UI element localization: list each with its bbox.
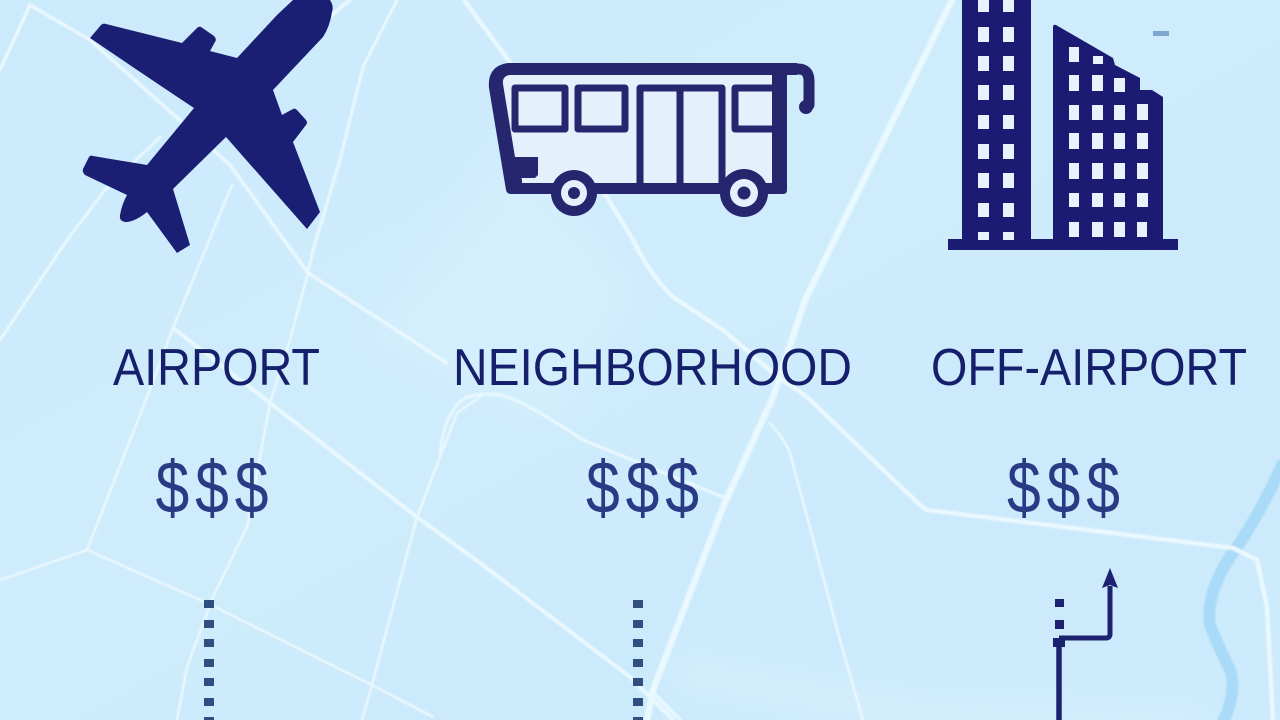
price: off-airport: $$$ [1007, 447, 1126, 529]
left tower [962, 0, 1031, 241]
ground base [948, 239, 1178, 250]
heading: off-airport: OFF-AIRPORT [931, 339, 1247, 397]
bus outline [489, 63, 797, 194]
small dash mark [1153, 31, 1169, 36]
bus headlight [514, 157, 538, 178]
icon: bus [489, 63, 813, 217]
icon: buildings [948, 0, 1178, 250]
right tower [1053, 25, 1163, 241]
river [1209, 465, 1280, 720]
arrow: off-airport route [1053, 568, 1118, 720]
dotted line: airport [204, 600, 214, 720]
building windows [978, 0, 1148, 240]
heading: airport: AIRPORT [113, 339, 320, 397]
bus body fill [500, 72, 775, 186]
bus mirror hook [790, 69, 813, 114]
dotted line: neighborhood [633, 600, 643, 720]
price: airport: $$$ [156, 447, 274, 529]
icon: airplane [83, 0, 333, 253]
price: neighborhood: $$$ [586, 447, 705, 529]
bus rear wheel [720, 169, 768, 217]
heading: neighborhood: NEIGHBORHOOD [453, 339, 852, 397]
bus front wheel [551, 170, 597, 216]
bus windows [515, 88, 772, 186]
